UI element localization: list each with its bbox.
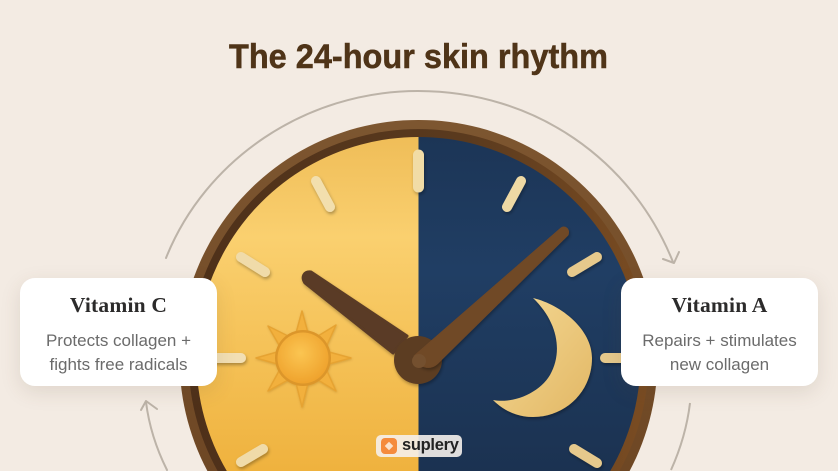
hour hand <box>303 272 407 353</box>
minute hand <box>414 227 568 367</box>
clock face: day half <box>196 137 418 471</box>
Vitamin C description <box>46 331 191 374</box>
Vitamin C description: Protects collagen + <box>46 331 191 350</box>
panel: Vitamin C <box>20 278 217 386</box>
logo badge: suplery <box>376 435 462 457</box>
clock hands and hub <box>303 227 568 384</box>
icon: logo mark <box>381 438 397 454</box>
clock face: night half <box>418 137 641 471</box>
orbit arrow: top <box>166 91 679 263</box>
Vitamin A description: Repairs + stimulates <box>642 331 797 350</box>
orbit arrow: lower left <box>141 401 167 470</box>
Vitamin A description <box>642 331 797 374</box>
clock rim <box>179 120 657 471</box>
Vitamin C description: fights free radicals <box>50 355 187 374</box>
Vitamin A heading: Vitamin A <box>672 293 767 317</box>
panel: Vitamin A <box>621 278 818 386</box>
Vitamin A description: new collagen <box>670 355 769 374</box>
Vitamin C heading: Vitamin C <box>70 293 167 317</box>
icon: crescent moon <box>493 298 592 417</box>
brand name: suplery <box>402 436 459 454</box>
orbit arc: lower right <box>671 403 690 470</box>
hour ticks <box>215 155 630 463</box>
hub pin <box>412 354 426 368</box>
hub <box>394 336 442 384</box>
title: The 24-hour skin rhythm <box>229 38 608 76</box>
icon: sun <box>256 311 351 407</box>
